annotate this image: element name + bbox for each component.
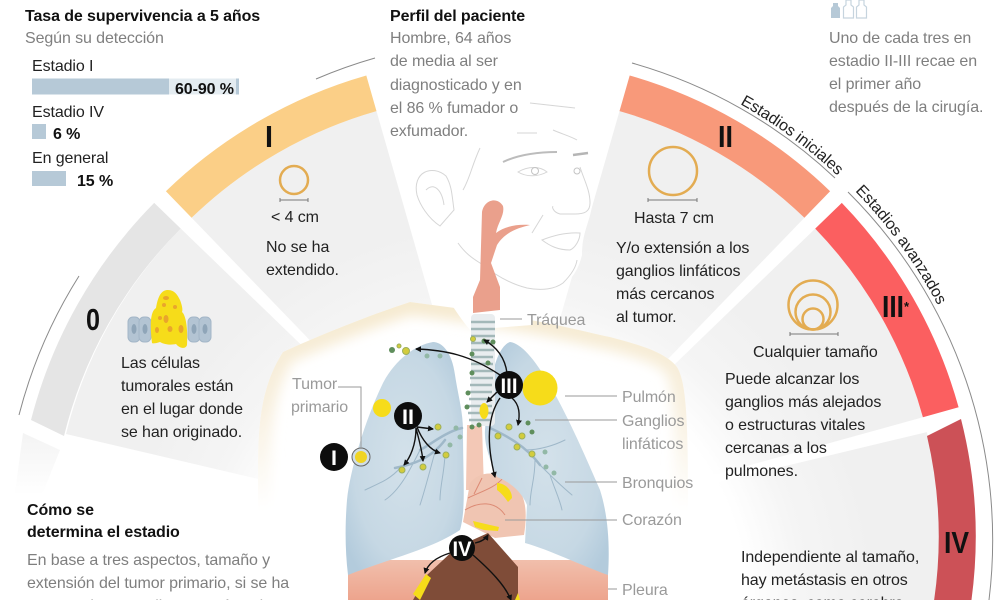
block: stage II: Y/o extensión a los bbox=[616, 240, 749, 257]
block: stage II: más cercanos bbox=[616, 286, 714, 303]
block: stage III: cercanas a los bbox=[725, 440, 827, 457]
marker: stage III: III bbox=[500, 375, 518, 398]
arrows: spread of stages II, III and IV bbox=[404, 340, 519, 600]
anatomy labels: linfáticos bbox=[622, 436, 683, 453]
block: patient profile: Perfil del paciente bbox=[390, 8, 525, 25]
block: stage III bbox=[725, 280, 910, 480]
anatomy labels: Corazón bbox=[622, 512, 682, 529]
block: survival rate chart: Según su detección bbox=[25, 30, 164, 47]
block: stage IV: hay metástasis en otros bbox=[741, 572, 908, 589]
head silhouette bbox=[398, 60, 592, 330]
illustration: liver bbox=[413, 533, 518, 600]
block: stage II: II bbox=[718, 119, 733, 154]
icon: tumour size up to 7 cm bbox=[648, 147, 697, 202]
block: stage 0: en el lugar donde bbox=[121, 401, 243, 418]
block: stage III: ganglios más alejados bbox=[725, 394, 881, 411]
marker: stage II: II bbox=[402, 406, 414, 429]
anatomy labels: primario bbox=[291, 399, 348, 416]
block: recurrence note: el primer año bbox=[829, 76, 921, 93]
panel: stage wedges backgrounds bbox=[66, 111, 943, 600]
marker: stage IV: IV bbox=[452, 538, 472, 561]
block: stage II: Hasta 7 cm bbox=[634, 210, 714, 227]
ring segment: stage I bbox=[166, 76, 376, 218]
block: stage II: al tumor. bbox=[616, 309, 676, 326]
block: survival rate chart: Estadio IV bbox=[32, 104, 104, 121]
block: stage I: I bbox=[265, 119, 273, 154]
marker: stage I: I bbox=[331, 447, 337, 470]
block: stage IV: IV bbox=[944, 525, 969, 560]
block: stage III: o estructuras vitales bbox=[725, 417, 865, 434]
illustration: human figure bbox=[258, 60, 688, 600]
anatomy labels: Tumor bbox=[292, 376, 338, 393]
marker: stage I bbox=[320, 443, 348, 471]
icon: tumour of any size bbox=[788, 280, 838, 336]
anatomy labels: Pleura bbox=[622, 582, 668, 599]
illustration: right lung bbox=[485, 342, 609, 575]
illustration: oesophagus and heart bbox=[463, 425, 526, 538]
illustration: left lung bbox=[346, 342, 464, 575]
block: patient profile: Hombre, 64 años bbox=[390, 30, 511, 47]
block: stage III: * bbox=[904, 299, 910, 314]
block: recurrence note: estadio II-III recae en bbox=[829, 53, 977, 70]
block: stage 0: 0 bbox=[86, 302, 100, 337]
marker: stage II bbox=[394, 402, 422, 430]
block: recurrence note bbox=[829, 30, 983, 116]
illustration: airway bbox=[473, 200, 530, 313]
ring segment: stage 0 bbox=[31, 203, 181, 436]
icon: three figures bbox=[831, 0, 866, 18]
block: stage 0 bbox=[86, 290, 243, 441]
block: patient profile: diagnosticado y en bbox=[390, 77, 522, 94]
ring segment: stage IV bbox=[927, 419, 976, 600]
anatomy labels: Tráquea bbox=[527, 312, 586, 329]
block: survival rate chart bbox=[25, 8, 260, 190]
block: recurrence note: Uno de cada tres en bbox=[829, 30, 971, 47]
block: stage 0: se han originado. bbox=[121, 424, 242, 441]
block: survival rate chart: En general bbox=[32, 150, 108, 167]
block: stage IV bbox=[741, 525, 969, 600]
anatomy labels: Ganglios bbox=[622, 413, 684, 430]
block: stage II bbox=[616, 119, 749, 326]
block: stage 0: Las células bbox=[121, 355, 200, 372]
block: survival rate chart: 6 % bbox=[53, 126, 80, 143]
block: how stage is determined bbox=[27, 502, 318, 600]
icon: tumour size under 4 cm bbox=[280, 166, 308, 202]
block: stage I: < 4 cm bbox=[271, 209, 319, 226]
arc label: Estadios iniciales: Estadios iniciales bbox=[741, 95, 842, 174]
anatomy labels: Pulmón bbox=[622, 389, 676, 406]
marker: primary tumour bbox=[352, 448, 370, 466]
block: patient profile bbox=[390, 8, 525, 140]
ring segment: stage II bbox=[620, 76, 830, 218]
block: patient profile: el 86 % fumador o bbox=[390, 100, 518, 117]
block: how stage is determined: determina el estadio bbox=[27, 524, 180, 541]
block: survival rate chart: Estadio I bbox=[32, 58, 93, 75]
block: stage III: pulmones. bbox=[725, 463, 798, 480]
block: stage I: extendido. bbox=[266, 262, 339, 279]
block: survival rate chart: 15 % bbox=[77, 173, 113, 190]
marker: stage III bbox=[495, 371, 523, 399]
block: stage III: Puede alcanzar los bbox=[725, 371, 859, 388]
arc label: Estadios avanzados: Estadios avanzados bbox=[856, 184, 944, 304]
illustration: bronchi bbox=[365, 428, 572, 510]
panel: faded lower-left segment bbox=[14, 433, 60, 500]
block: survival rate chart: 60-90 % bbox=[175, 81, 234, 98]
block: patient profile: de media al ser bbox=[390, 53, 499, 70]
illustration: tumours bbox=[373, 370, 558, 600]
illustration: trachea rings bbox=[468, 314, 495, 426]
illustration: lymph nodes bbox=[389, 336, 556, 476]
block: survival rate chart: Tasa de supervivencia a 5 años bbox=[25, 8, 260, 25]
block: stage IV: Independiente al tamaño, bbox=[741, 549, 919, 566]
block: stage 0: tumorales están bbox=[121, 378, 233, 395]
icon: tumour cells bbox=[128, 290, 211, 348]
block: how stage is determined: En base a tres aspectos, tamaño y bbox=[27, 552, 270, 569]
block: stage I: No se ha bbox=[266, 239, 329, 256]
skin edge tint bbox=[258, 302, 688, 482]
marker: stage IV bbox=[449, 535, 475, 561]
block: stage I bbox=[265, 119, 339, 279]
facial lines bbox=[416, 103, 590, 289]
block: patient profile: exfumador. bbox=[390, 123, 468, 140]
block: stage II: ganglios linfáticos bbox=[616, 263, 740, 280]
anatomy labels: Bronquios bbox=[622, 475, 693, 492]
block: how stage is determined: extensión del tumor primario, si se ha bbox=[27, 575, 289, 592]
block: stage III: Cualquier tamaño bbox=[753, 344, 878, 361]
body silhouette bbox=[258, 302, 688, 600]
ring segment: stage III bbox=[815, 203, 959, 417]
illustration: abdomen and diaphragm bbox=[348, 560, 608, 600]
anatomy labels bbox=[291, 312, 693, 599]
block: recurrence note: después de la cirugía. bbox=[829, 99, 983, 116]
block: how stage is determined: Cómo se bbox=[27, 502, 94, 519]
block: stage III: III bbox=[882, 289, 904, 324]
